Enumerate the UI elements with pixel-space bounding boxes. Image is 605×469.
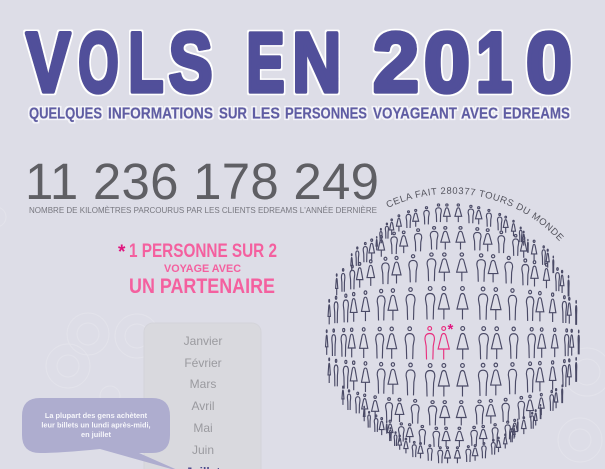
- title: E: [246, 16, 285, 110]
- subtitle: [29, 106, 570, 122]
- speech bubble: en juillet: [81, 430, 112, 439]
- title: V: [26, 16, 70, 110]
- subtitle: EDREAMS: [503, 106, 570, 122]
- asterisk on couple: *: [448, 321, 454, 338]
- equator row with highlighted couple: [326, 327, 579, 360]
- partner statistic: VOYAGE AVEC: [164, 263, 241, 275]
- number caption: NOMBRE DE KILOMÈTRES PARCOURUS PAR LES CLIENTS EDREAMS L'ANNÉE DERNIÈRE: [29, 206, 377, 215]
- subtitle: AVEC: [461, 106, 498, 122]
- subtitle: INFORMATIONS: [108, 106, 213, 122]
- subtitle: SUR: [219, 106, 247, 122]
- months panel: Mars: [190, 377, 216, 391]
- title: [26, 16, 572, 110]
- subtitle: LES: [252, 106, 280, 122]
- big number: 11 236 178 249: [25, 153, 379, 210]
- curved label: tours du monde: CELA FAIT 280377 TOURS DU MONDE: [386, 187, 564, 242]
- subtitle: VOYAGEANT: [373, 106, 457, 122]
- partner statistic: 1 PERSONNE SUR 2: [129, 241, 277, 262]
- title: N: [292, 16, 341, 110]
- partner statistic: [118, 241, 277, 298]
- months panel: Janvier: [184, 334, 222, 348]
- subtitle: QUELQUES: [29, 106, 102, 122]
- months panel: [144, 323, 261, 469]
- months panel: Février: [184, 356, 222, 370]
- sphere of people: [326, 204, 579, 463]
- speech bubble: [22, 398, 182, 469]
- title: 0: [526, 16, 572, 110]
- partner statistic: *: [118, 242, 126, 263]
- title: L: [128, 16, 164, 110]
- title: O: [78, 16, 119, 110]
- title: 1: [476, 16, 512, 110]
- title: S: [169, 16, 213, 110]
- subtitle: PERSONNES: [285, 106, 367, 122]
- months panel: Avril: [191, 399, 215, 413]
- speech bubble: La plupart des gens achètent: [45, 411, 148, 420]
- partner statistic: UN PARTENAIRE: [129, 275, 275, 298]
- speech bubble: leur billets un lundi après-midi,: [41, 420, 151, 430]
- title: 0: [424, 16, 470, 110]
- months panel: Mai: [193, 421, 213, 435]
- decorative swirls: [0, 207, 605, 462]
- months panel: Juin: [192, 443, 214, 457]
- title: 2: [373, 16, 419, 110]
